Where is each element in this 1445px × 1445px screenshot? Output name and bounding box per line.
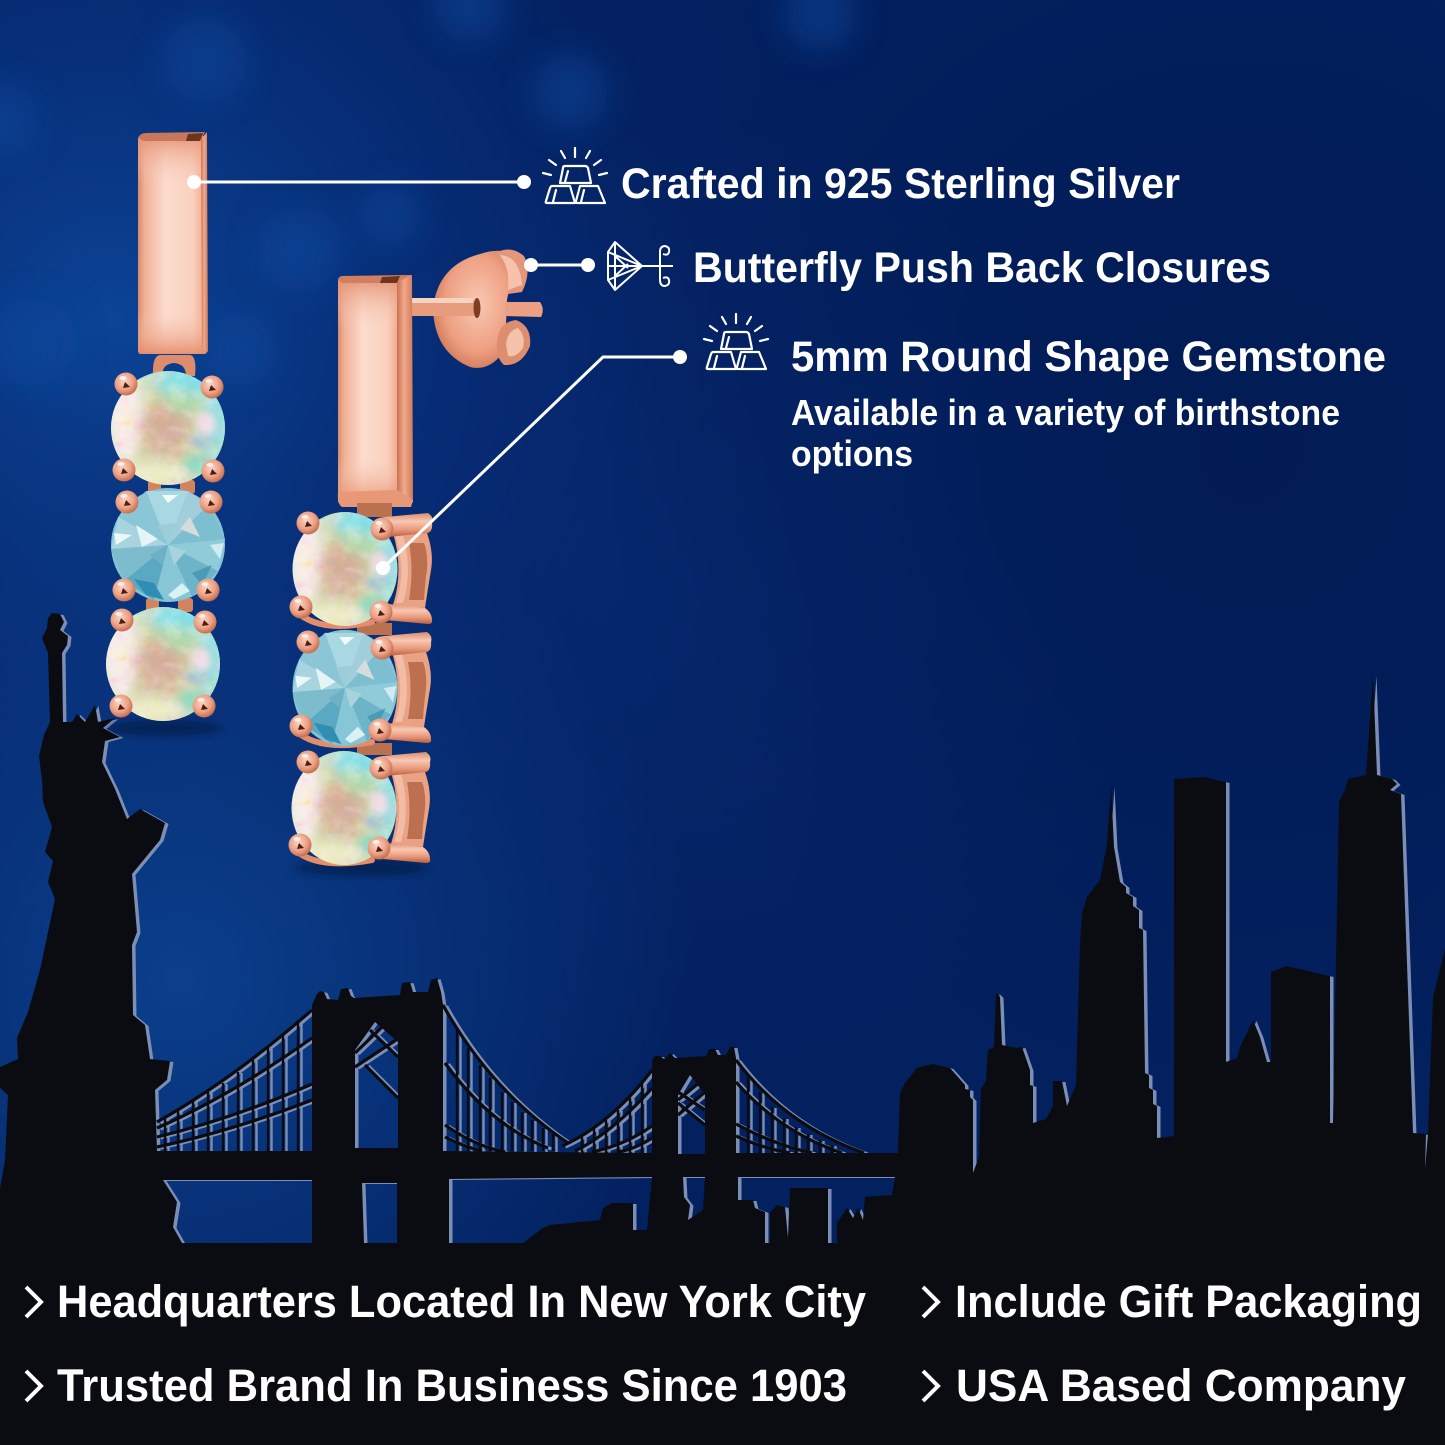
earring: side-view bar with butterfly back and three gemstones [288, 249, 543, 876]
bullet: trusted brand: Trusted Brand In Business Since 1903 [57, 1360, 847, 1411]
gem: top opal [290, 507, 400, 626]
feature heading: sterling silver: Crafted in 925 Sterling Silver [621, 160, 1180, 208]
icon: diamond stud with butterfly back [608, 242, 673, 290]
settings: gallery rails [368, 513, 432, 863]
connectors [146, 480, 195, 612]
gem: bottom opal [289, 746, 399, 865]
icon: gold bars [543, 148, 607, 203]
bullet: headquarters: Headquarters Located In New York City [57, 1276, 866, 1327]
settings: connectors [357, 503, 392, 755]
icon: gold bars [704, 314, 768, 369]
earring: front-view bar with three gemstones [103, 132, 228, 736]
feature subtext: birthstone options [791, 392, 1340, 474]
prongs [288, 512, 394, 860]
bar [338, 275, 413, 507]
jump ring [153, 355, 195, 376]
feature heading: gemstone: 5mm Round Shape Gemstone [791, 333, 1386, 381]
callout line: butterfly closures [524, 258, 595, 272]
skyline: New York silhouette with Statue of Liberty, bridges and towers [0, 613, 1445, 1445]
bar top [138, 132, 208, 354]
feature subtext: birthstone options: Available in a variety of birthstone [791, 392, 1340, 433]
callout line: sterling silver [187, 175, 531, 189]
prongs [110, 372, 224, 718]
gem: bottom opal [103, 602, 223, 721]
callout line: gemstone [376, 350, 687, 575]
bullet: USA based: USA Based Company [956, 1360, 1406, 1411]
feature subtext: birthstone options: options [791, 433, 913, 474]
lower gem rims [295, 610, 372, 863]
feature heading: butterfly closures: Butterfly Push Back Closures [693, 244, 1271, 292]
bullet: gift packaging: Include Gift Packaging [955, 1276, 1422, 1327]
post [411, 298, 543, 318]
gem: top opal [108, 366, 228, 485]
gem: middle blue cut stone [111, 488, 225, 602]
gem: middle blue cut stone [293, 630, 397, 746]
butterfly push back [433, 249, 530, 368]
